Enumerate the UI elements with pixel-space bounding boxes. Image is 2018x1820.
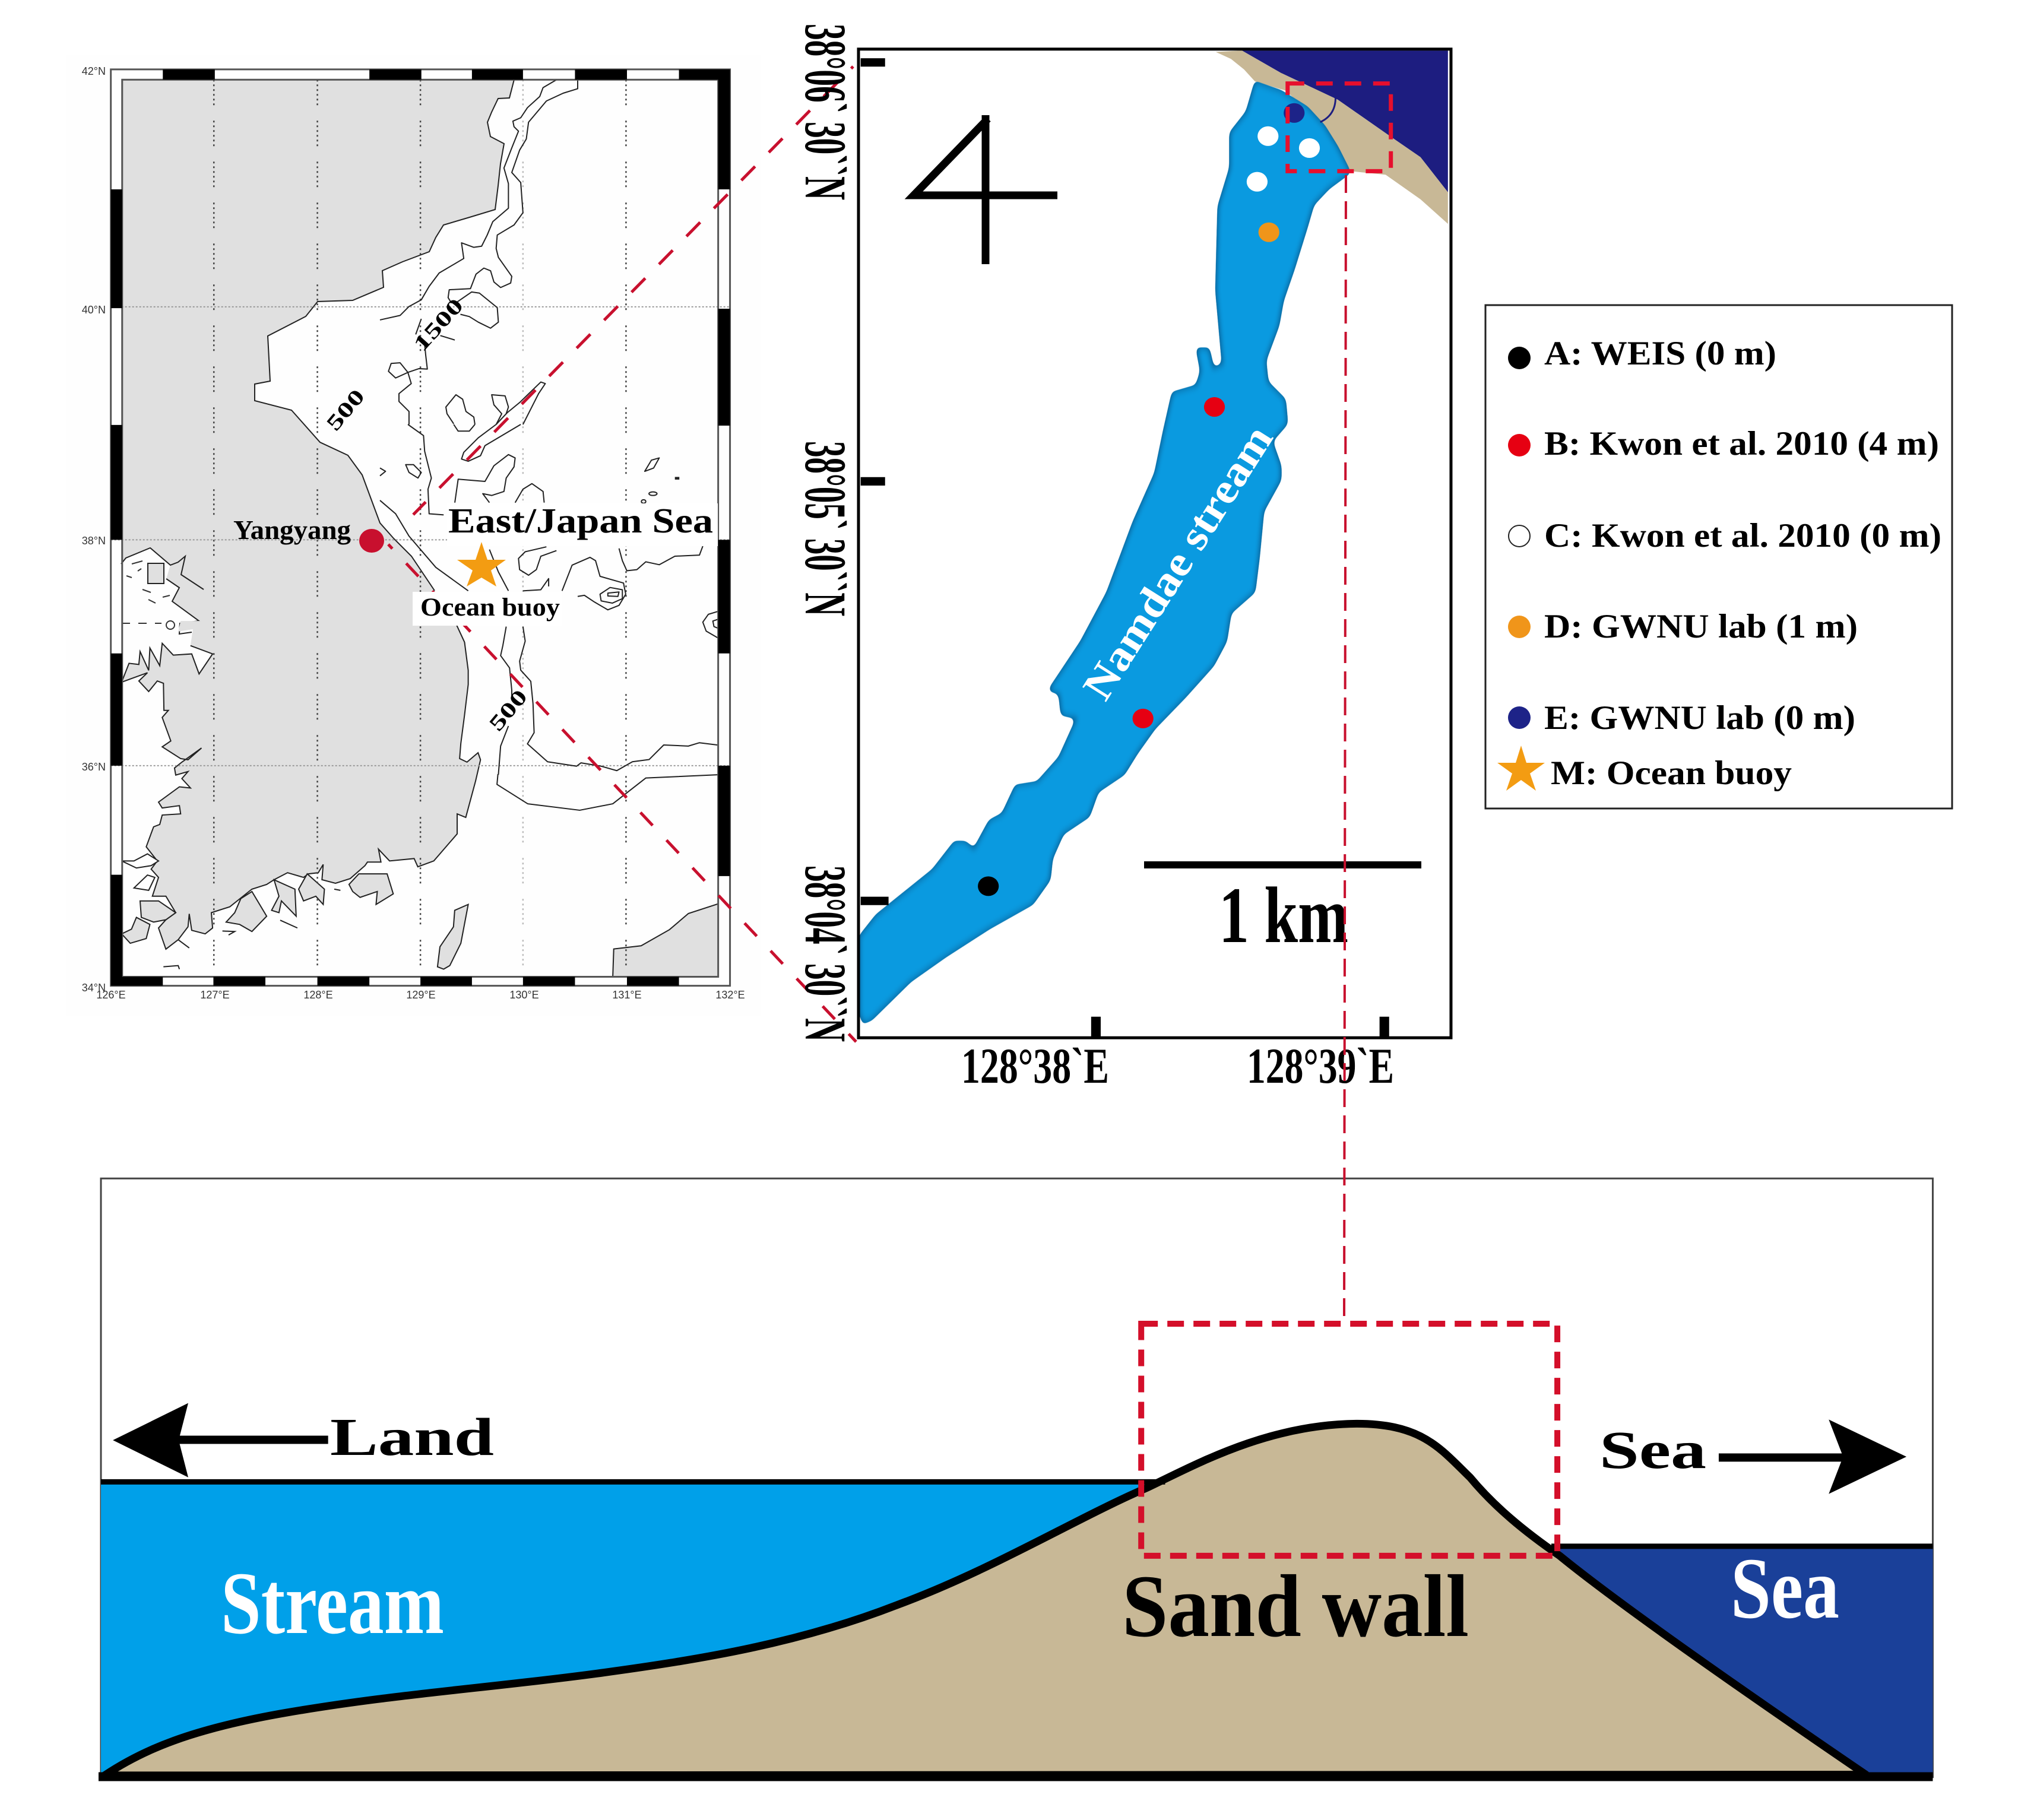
label: Namdae stream: Namdae stream (1073, 417, 1282, 708)
legend item B: B: Kwon et al. 2010 (4 m) (1544, 425, 1939, 462)
legend item D: D: GWNU lab (1 m) (1544, 608, 1858, 645)
latitude labels: 38°05` 30``N (793, 441, 858, 616)
latitude labels (793, 24, 858, 1042)
bathymetric contours south (497, 774, 718, 810)
latitude labels: 42°N (82, 65, 106, 77)
connector line from inset box down to cross-section (1344, 175, 1346, 1319)
panel: regional map of the East/Japan Sea (66, 55, 856, 1042)
stream surface line (101, 1479, 1165, 1485)
scale bar label: 1 km (1219, 871, 1348, 960)
longitude labels: 126°E (96, 989, 126, 1001)
longitude labels: 132°E (715, 989, 745, 1001)
label: East/Japan Sea: East/Japan Sea (448, 501, 713, 540)
legend item A: A: WEIS (0 m) (1544, 335, 1776, 372)
station E (1284, 103, 1304, 123)
latitude labels: 38°04` 30``N (793, 865, 858, 1042)
bathymetric contours north (380, 80, 578, 424)
sand wall (104, 1423, 1866, 1775)
station D (1259, 223, 1279, 242)
panel: sand wall cross-section (99, 1178, 1933, 1777)
latitude labels: 38°06` 30``N (793, 24, 858, 200)
red dashed sand wall inset box (1288, 84, 1391, 171)
longitude labels: 129°E (406, 989, 436, 1001)
icon: ocean buoy star (457, 542, 506, 586)
icon: north arrow (914, 115, 1057, 264)
grid lines (111, 80, 730, 976)
longitude labels: 130°E (509, 989, 539, 1001)
sea area (1242, 50, 1448, 192)
map frame with black and white ticks (111, 69, 730, 986)
latitude labels (82, 65, 106, 994)
contour label 500 north: 500 (321, 385, 369, 435)
label: Ocean buoy: Ocean buoy (420, 594, 560, 622)
label: Yangyang: Yangyang (233, 515, 351, 545)
label: Land: Land (330, 1408, 494, 1467)
legend item M (1497, 746, 1792, 792)
longitude labels (96, 989, 745, 1001)
panel frame (858, 49, 1451, 1038)
label: Stream: Stream (221, 1554, 444, 1653)
stations B (1133, 397, 1225, 728)
axis ticks (861, 58, 1389, 1038)
stream water (101, 1483, 1177, 1777)
stream body (859, 81, 1351, 1024)
legend item E: E: GWNU lab (0 m) (1544, 699, 1855, 737)
longitude labels: 128°E (303, 989, 333, 1001)
sea water (1548, 1546, 1933, 1777)
land masses (121, 80, 718, 976)
arrow: toward land (113, 1403, 328, 1477)
label: Sea above surface: Sea (1599, 1421, 1706, 1480)
longitude labels: 131°E (612, 989, 642, 1001)
inlet curve (1320, 97, 1336, 122)
longitude label 128°39`E: 128°39`E (1247, 1038, 1394, 1094)
station A (978, 876, 999, 896)
zoom connector lines from map to stream panel (388, 66, 856, 1042)
label: Sand wall: Sand wall (1122, 1557, 1469, 1656)
location marker: Yangyang (359, 529, 384, 553)
stations C (1247, 126, 1320, 192)
scale bar (1144, 861, 1421, 868)
sea surface line (1551, 1543, 1933, 1549)
longitude label 128°38`E: 128°38`E (961, 1038, 1109, 1094)
legend item C: C: Kwon et al. 2010 (0 m) (1544, 517, 1941, 554)
contour label 500 south: 500 (484, 685, 532, 735)
contour label 1500: 1500 (408, 294, 468, 356)
longitude labels: 127°E (200, 989, 230, 1001)
bathymetric contours central (380, 424, 720, 775)
latitude labels: 36°N (82, 761, 106, 773)
legend (1485, 305, 1952, 808)
panel: Namdae stream detail map (793, 24, 1451, 1094)
latitude labels: 38°N (82, 535, 106, 547)
latitude labels: 40°N (82, 304, 106, 316)
bottom line (99, 1773, 1933, 1781)
label: Sea in water: Sea (1731, 1540, 1839, 1637)
latitude labels: 34°N (82, 982, 106, 994)
arrow: toward sea (1719, 1419, 1906, 1494)
legend item M: M: Ocean buoy (1551, 754, 1792, 792)
red dashed inset box (1141, 1324, 1557, 1556)
sand bar (1216, 50, 1448, 224)
